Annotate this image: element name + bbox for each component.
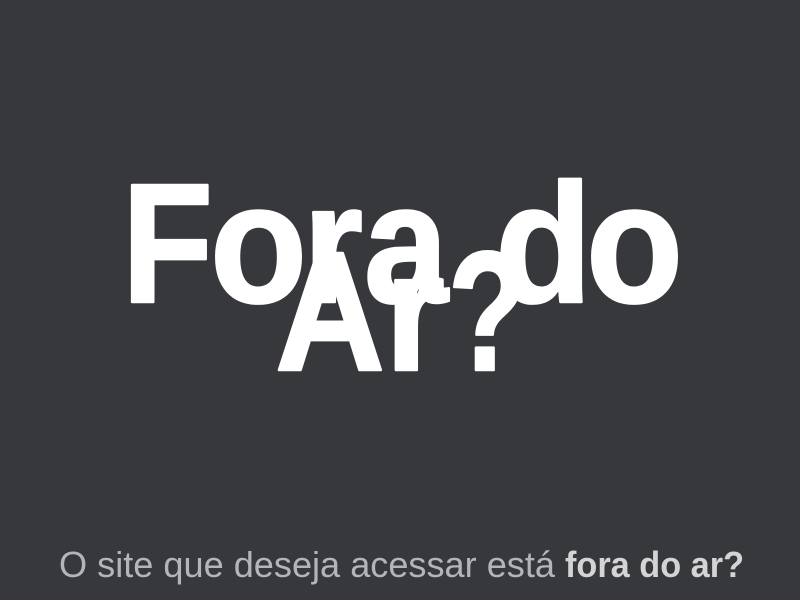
title word: Ar?: r [385, 217, 445, 407]
subtitle [59, 544, 744, 585]
subtitle: bold text: fora do ar? [565, 544, 744, 585]
title word: Ar?: ? [448, 217, 527, 407]
title word: Fora: o [210, 149, 307, 339]
subtitle: regular text: O site que deseja acessar está [59, 544, 556, 585]
title word: do: o [586, 149, 683, 339]
title word: Fora: r [303, 149, 363, 339]
title: Fora do Ar? [122, 149, 683, 407]
title word: Fora: a [364, 149, 449, 339]
title word: Fora: F [122, 149, 213, 339]
title word: Ar?: A [275, 217, 385, 407]
title word: do: d [495, 149, 592, 339]
